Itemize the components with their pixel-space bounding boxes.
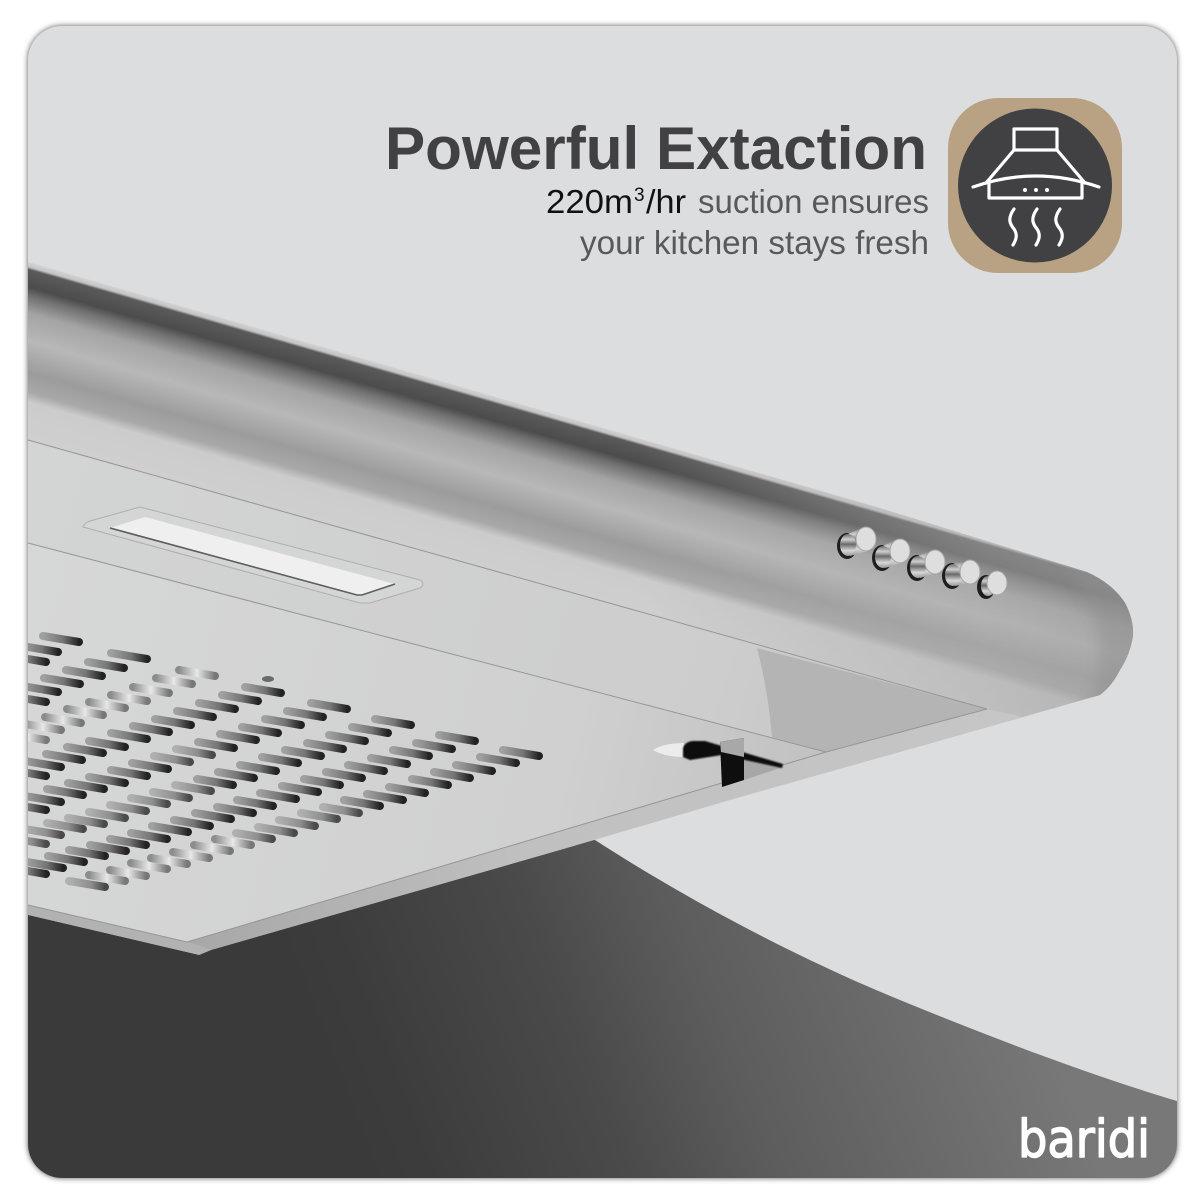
suction figure: /hr [646,183,686,220]
knob 4 [942,560,980,589]
dark slots [10,636,539,874]
rim right [187,709,1023,950]
subtitle line one: suction ensures [698,183,929,220]
filter panel [28,543,826,942]
suction figure [546,183,686,220]
subtitle [546,183,929,261]
front plate [28,760,870,955]
mid grey slots [10,749,359,887]
suction figure: 220m [546,183,633,220]
light bar [83,507,423,603]
icon: extractor hood badge [948,98,1122,273]
small vent hole [262,676,274,682]
range hood [10,250,1140,955]
suction figure: 3 [634,185,645,206]
drum body [28,262,1134,714]
control knobs [837,527,1007,599]
hood line icon [973,129,1099,245]
subtitle line two: your kitchen stays fresh [580,224,929,261]
end cap shading [1096,617,1133,696]
brand logo: baridi [1018,1110,1150,1170]
knob 2 [872,539,910,571]
badge tile [948,98,1122,273]
rim left [28,905,211,955]
rear vent opening [653,738,783,787]
badge circle [958,108,1112,262]
seam lines [28,440,987,942]
vent slots grid [10,636,539,887]
knob 3 [907,550,945,581]
knob 5 [977,571,1007,599]
dark curved countertop shape [28,840,1177,1178]
bright reflective slots [10,670,251,881]
drum lighter right end [698,465,1132,717]
knob 1 [837,527,876,559]
artwork clipped to card [10,250,1177,1178]
title: Powerful Extaction [385,115,927,182]
plate reflection [757,648,987,752]
hood indicator dots [1023,188,1049,192]
